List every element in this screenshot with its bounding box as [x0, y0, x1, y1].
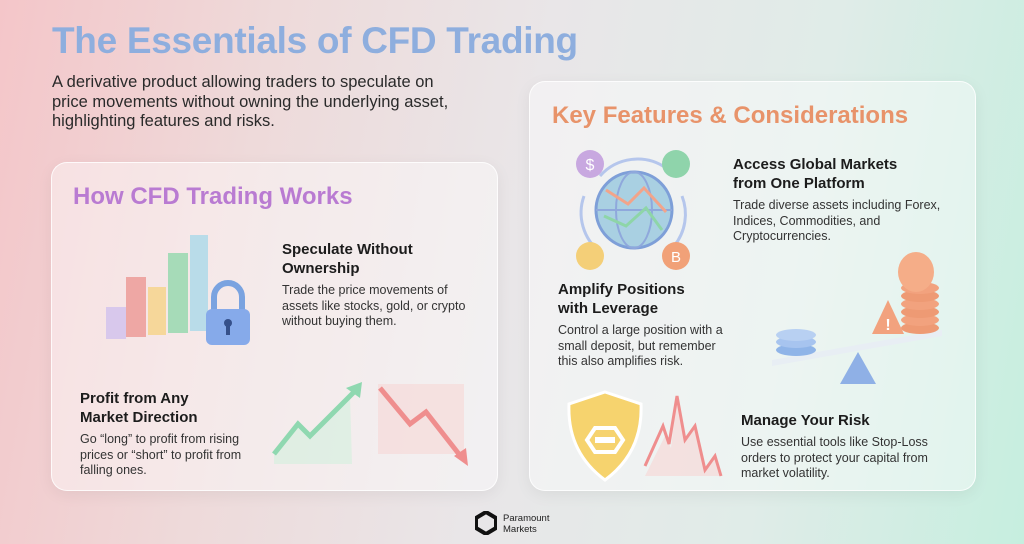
text: access global markets: Access Global Markets from One Platform	[733, 156, 897, 192]
icon: leverage seesaw: !	[885, 317, 891, 334]
icon: globe with assets: B	[671, 249, 681, 266]
heading: key features: Key Features & Considerations	[552, 102, 908, 129]
text: access global markets	[733, 156, 940, 243]
text: access global markets: Trade diverse assets including Forex, Indices, Commodities, and Cryptocurrencies.	[733, 198, 940, 243]
text: profit from any market direction: Profit from Any Market Direction	[80, 390, 198, 426]
text: speculate without ownership: Speculate Without Ownership	[282, 241, 413, 277]
icon: globe with assets: $	[586, 157, 595, 174]
icon: up and down trend arrows	[272, 382, 468, 466]
icon: shield with volatile chart	[568, 390, 722, 482]
text: manage your risk: Use essential tools like Stop-Loss orders to protect your capital from market volatility.	[741, 435, 928, 480]
heading: how CFD trading works: How CFD Trading Works	[73, 183, 353, 210]
text: profit from any market direction: Go “long” to profit from rising prices or “short” to profit from falling ones.	[80, 432, 241, 477]
panel: how CFD trading works	[51, 162, 498, 491]
subtitle: A derivative product allowing traders to speculate on price movements without owning the underlying asset, highlighting features and risks.	[52, 73, 448, 130]
panel: key features & considerations	[529, 81, 976, 491]
text: speculate without ownership	[282, 241, 465, 328]
text: manage your risk	[741, 412, 928, 480]
logo: paramount markets	[475, 511, 550, 535]
icon: globe with assets	[576, 150, 690, 270]
text: speculate without ownership: Trade the price movements of assets like stocks, gold, or crypto without buying them.	[282, 283, 465, 328]
logo: paramount markets: Markets	[503, 524, 537, 535]
logo: paramount markets: Paramount	[503, 513, 549, 524]
icon: leverage seesaw	[776, 252, 939, 384]
title: The Essentials of CFD Trading	[52, 20, 578, 61]
text: amplify positions with leverage: Amplify Positions with Leverage	[558, 281, 685, 317]
text: amplify positions with leverage	[558, 281, 723, 368]
text: profit from any market direction	[80, 390, 241, 477]
icon: bar chart with lock	[106, 235, 250, 345]
text: manage your risk: Manage Your Risk	[741, 412, 870, 429]
text: amplify positions with leverage: Control a large position with a small deposit, but remember this also amplifies risk.	[558, 323, 723, 368]
